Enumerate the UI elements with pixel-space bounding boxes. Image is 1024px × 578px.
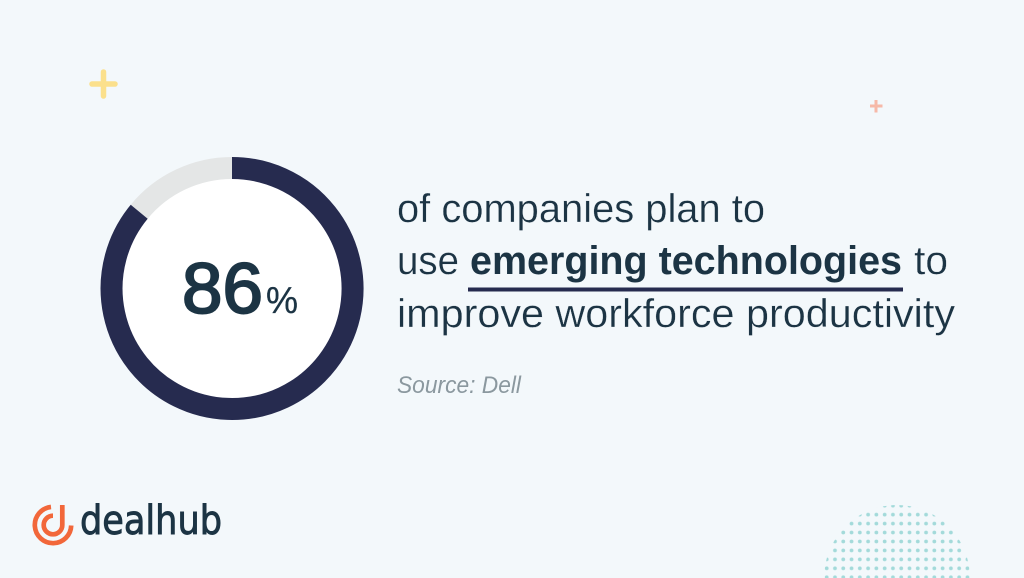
line 3: improve workforce productivity: [397, 292, 955, 336]
icon: yellow plus: [92, 72, 115, 96]
source note: Source: Dell: [397, 372, 522, 399]
donut chart: 86%: [112, 168, 353, 409]
remaining 14% segment: [139, 168, 232, 212]
line 2 end: to: [914, 239, 948, 283]
decorative dot semicircle: [824, 505, 970, 578]
logo: dealhub: [35, 498, 222, 544]
percent sign: %: [266, 280, 298, 321]
logo mark: [35, 505, 71, 543]
icon: pink plus: [870, 100, 882, 112]
statistic value: 86: [182, 250, 263, 329]
logo wordmark: dealhub: [80, 498, 222, 544]
line 2 lead-in: use: [397, 239, 459, 283]
highlight underline: [468, 288, 903, 292]
86% segment: [112, 168, 353, 409]
chart centre disc: [122, 178, 342, 398]
line 1: of companies plan to: [397, 187, 765, 231]
highlighted phrase: emerging technologies: [470, 239, 902, 283]
statement text: [397, 187, 955, 336]
